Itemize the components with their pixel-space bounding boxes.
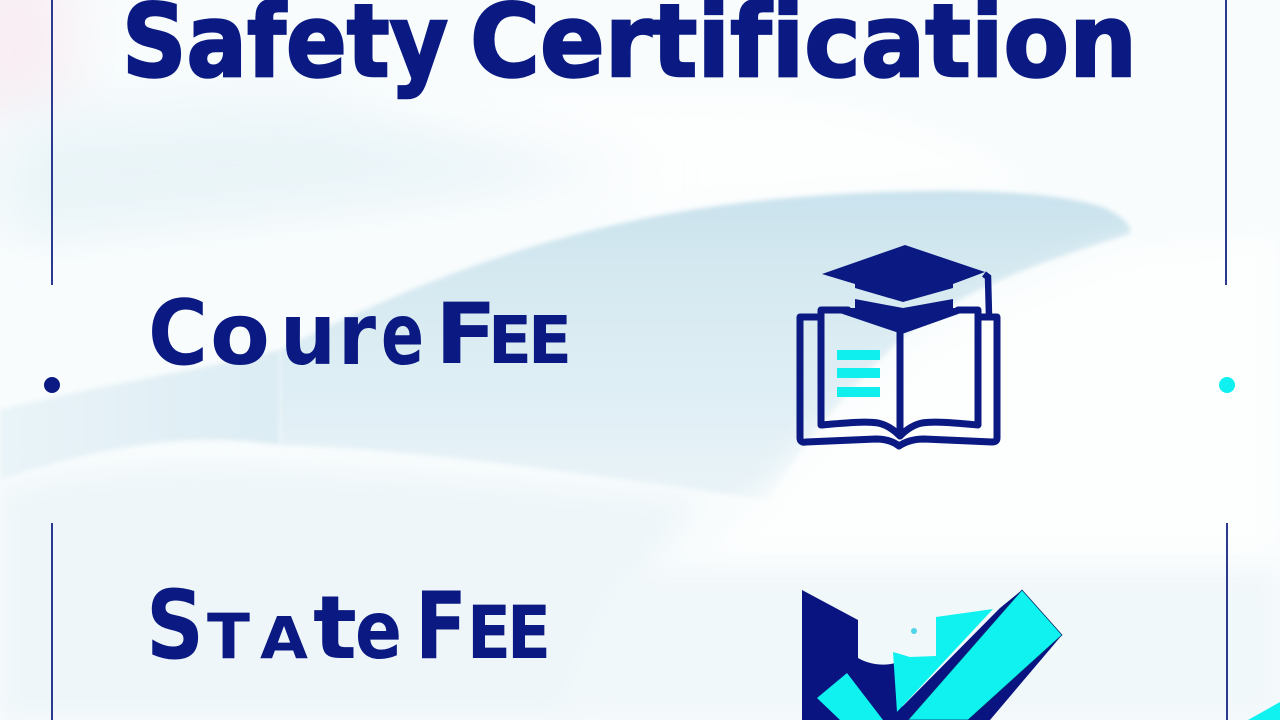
- icon part: cap underside and tassel: [825, 274, 989, 334]
- icon part: cyan text lines: [837, 350, 880, 397]
- label: state fee: e: [355, 584, 402, 677]
- label: course fee: [148, 281, 572, 386]
- label: course fee: r: [338, 285, 377, 385]
- icon part: cyan shield panel: [893, 609, 993, 712]
- icon part: mortarboard: [822, 245, 985, 302]
- icon: graduation cap on open book: [800, 245, 997, 446]
- icon part: open book: [800, 310, 997, 446]
- label: course fee: o: [210, 285, 270, 385]
- accent: cyan corner shape: [1248, 702, 1280, 720]
- label: state fee: E: [467, 591, 511, 676]
- label: state fee: T: [207, 600, 250, 673]
- label: state fee: E: [507, 591, 551, 676]
- icon part: navy shield: [802, 590, 905, 720]
- icon: check mark badge: [802, 590, 1062, 720]
- label: state fee: [146, 571, 551, 681]
- label: course fee: C: [148, 281, 208, 386]
- label: course fee: E: [488, 302, 532, 379]
- frame: right vertical line with node: [1219, 0, 1235, 720]
- label: state fee: A: [260, 604, 308, 672]
- title: [122, 0, 1137, 100]
- label: state fee: S: [146, 571, 204, 681]
- label: course fee: E: [528, 302, 572, 379]
- icon part: check shadow: [880, 590, 1062, 720]
- icon part: small dot: [911, 628, 917, 634]
- label: state fee: t: [313, 577, 357, 679]
- label: state fee: F: [415, 572, 467, 680]
- label: course fee: u: [280, 285, 336, 385]
- icon part: cyan check mark: [817, 590, 1062, 720]
- frame: left vertical line with node: [44, 0, 60, 720]
- label: course fee: F: [435, 285, 497, 383]
- label: course fee: e: [381, 285, 424, 385]
